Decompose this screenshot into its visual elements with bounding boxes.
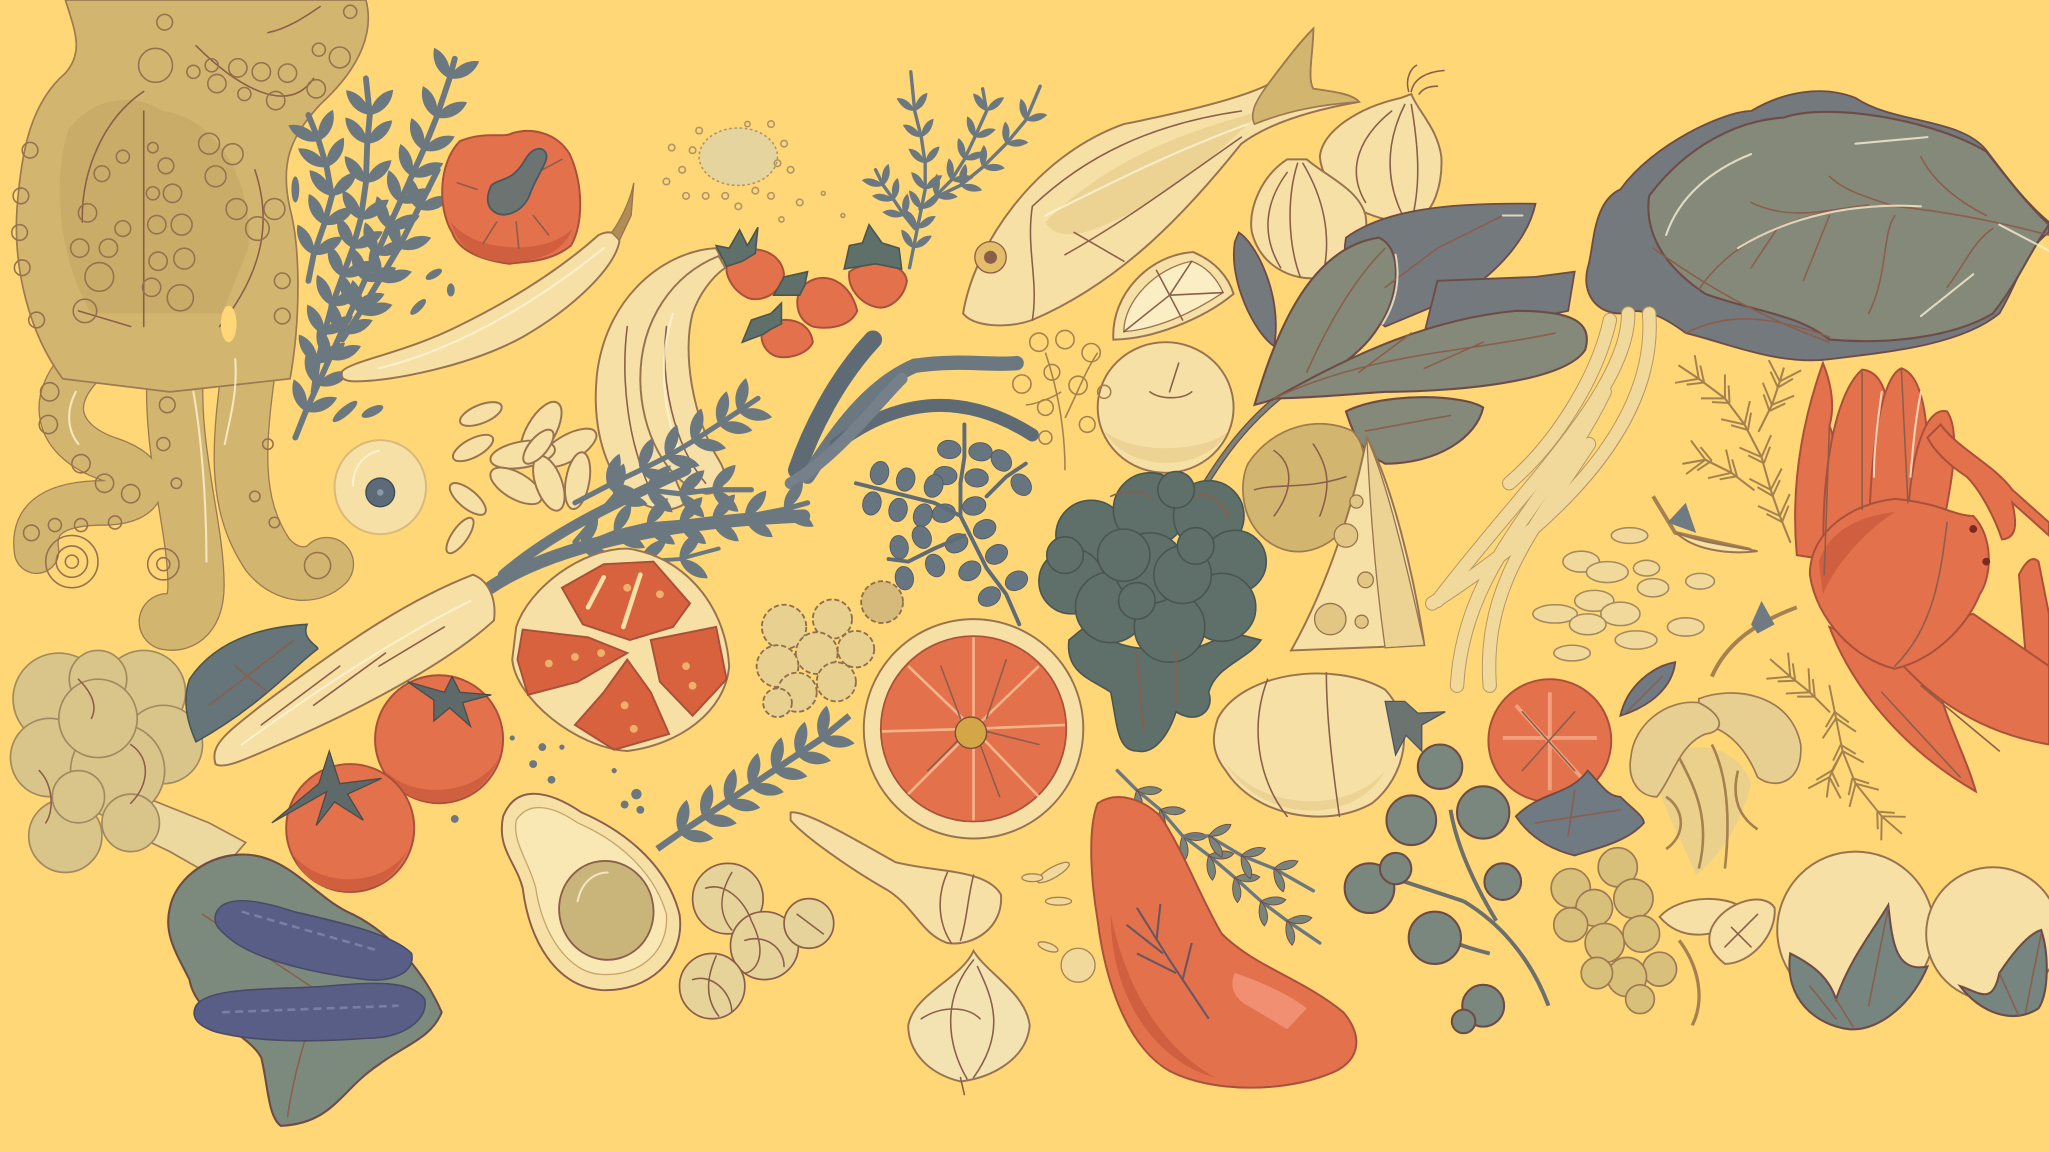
beans cluster — [1533, 528, 1714, 661]
salmon steak — [1091, 797, 1356, 1088]
parsnip leaves — [490, 398, 808, 588]
tomato, lower — [272, 751, 414, 892]
herb sprig over steak — [1117, 771, 1320, 943]
tomato, upper — [375, 675, 503, 803]
mushrooms — [1630, 693, 1801, 875]
octopus — [12, 0, 368, 622]
almonds and petals — [442, 396, 602, 557]
onions — [1251, 65, 1444, 279]
celeriac — [1243, 424, 1365, 552]
broccoli — [1039, 472, 1266, 751]
rosemary sprig, top left — [291, 59, 455, 438]
grapes — [1551, 848, 1699, 1025]
spinach leaves — [1200, 204, 1587, 494]
fish — [963, 29, 1359, 325]
grapefruit — [864, 619, 1083, 839]
artichoke, left — [1777, 852, 1934, 1029]
garlic bulb — [908, 951, 1030, 1095]
fern, lower right — [1771, 660, 1901, 833]
cream chili — [342, 183, 634, 381]
cilantro sprig — [1345, 744, 1549, 1033]
scallion stalks — [791, 340, 1032, 483]
herb seeds — [1022, 859, 1095, 982]
lemon wedge — [1113, 252, 1234, 340]
scattered grains — [663, 121, 845, 222]
lettuce leaf — [168, 855, 442, 1126]
tomato slice — [1488, 679, 1611, 802]
round-leaf sprig — [856, 424, 1026, 624]
cauliflower — [10, 650, 246, 878]
clove pods — [1653, 496, 1797, 677]
garlic with long stem — [791, 812, 1001, 944]
slate dots and sprig — [451, 716, 849, 849]
fern, right — [1679, 366, 1790, 542]
avocado — [502, 794, 680, 990]
red bell pepper — [442, 131, 580, 264]
cabbage leaf — [1586, 91, 2049, 360]
crab — [1795, 363, 2049, 792]
cheese wedge — [1291, 438, 1424, 650]
walnut cluster — [757, 581, 903, 717]
artichoke, right — [1926, 867, 2049, 1016]
brussels sprouts — [680, 863, 834, 1019]
blueberry — [335, 440, 426, 534]
apple — [1098, 342, 1234, 473]
banana — [596, 248, 725, 510]
dark leaf group — [1516, 662, 1675, 856]
small white flowers — [1013, 330, 1111, 470]
pomegranate — [512, 549, 729, 751]
dark leaves beside cauliflower — [186, 624, 318, 742]
cucumbers — [194, 901, 425, 1041]
herb sprig, top centre — [876, 72, 1040, 268]
strawberries — [716, 225, 907, 357]
long pale noodles — [1432, 313, 1650, 686]
parsnip — [214, 575, 495, 766]
cream squash — [1214, 673, 1445, 817]
cream nuts — [1660, 899, 1775, 964]
